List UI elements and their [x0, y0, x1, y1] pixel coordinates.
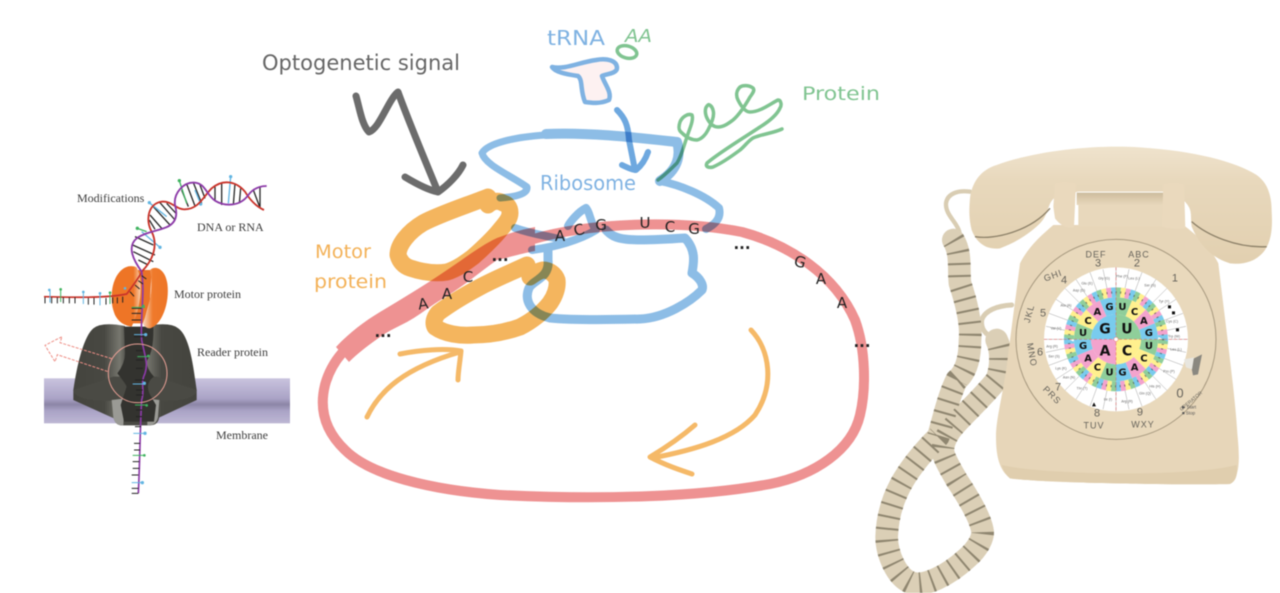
amino acid labels: Arg (R): [1046, 344, 1058, 348]
motor protein upper ring: [398, 197, 510, 273]
tRNA arrow: [617, 110, 648, 170]
mRNA codon letters: C: [665, 218, 675, 236]
telephone base: [996, 225, 1239, 484]
reader circle: [108, 344, 167, 403]
dial numbers: 3: [1095, 257, 1101, 269]
amino acid labels: Ala (A): [1061, 303, 1071, 307]
label: protein: Protein: [802, 83, 880, 105]
amino acid labels: Cys (C): [1166, 319, 1178, 323]
dial: [1016, 239, 1216, 439]
amino acid labels: Asp (D): [1073, 288, 1085, 292]
red axes: [1044, 267, 1188, 411]
DNA helix: [132, 175, 267, 272]
amino acid labels: Leu (L): [1128, 276, 1140, 280]
dial numbers: 5: [1040, 307, 1046, 319]
translocating strand: [138, 272, 146, 493]
motor direction arrow left: [367, 350, 461, 417]
mRNA codon letters: A: [816, 270, 827, 288]
stop and start markers: [1092, 305, 1179, 406]
centre letters: A: [1100, 343, 1111, 359]
middle ring letters: [1079, 302, 1153, 379]
label: motor protein: Motor: [315, 241, 371, 263]
middle ring letters: G: [1145, 328, 1153, 339]
mRNA codon letters: C: [463, 268, 473, 286]
amino acid labels: Phe (F): [1116, 274, 1128, 278]
dial numbers: 4: [1061, 274, 1067, 286]
middle ring letters: A: [1094, 307, 1102, 318]
label: DNA or RNA: DNA or RNA: [197, 220, 264, 234]
middle ring letters: C: [1131, 307, 1138, 318]
centre letters: C: [1122, 343, 1132, 359]
ribosome outline: [482, 134, 720, 320]
purple strand: [132, 183, 267, 272]
amino acid labels: Pro (P): [1163, 369, 1175, 373]
mRNA codon letters: ...: [491, 247, 509, 265]
amino acid labels: [1046, 274, 1182, 403]
middle ring letters: U: [1145, 341, 1153, 352]
codon centre quadrants: [1116, 314, 1141, 339]
label: motor protein: Motor protein: [174, 287, 241, 301]
label: membrane: Membrane: [216, 428, 268, 442]
dial numbers: GHI: [1042, 268, 1064, 283]
dial numbers: JKL: [1022, 303, 1036, 324]
base lower shading: [1002, 465, 1237, 484]
amino acid labels: Leu (L): [1170, 347, 1182, 351]
motor protein lower ring: [434, 265, 557, 335]
dial numbers: ABC: [1128, 249, 1150, 259]
codon outer ring: [1069, 292, 1163, 386]
helix rungs: [133, 183, 260, 265]
single strand tail: [44, 272, 142, 297]
mRNA codon letters: ...: [733, 235, 751, 253]
mRNA codon letters: C: [572, 220, 586, 240]
optogenetic arrow: [356, 92, 463, 192]
outer ring letters: [1069, 292, 1163, 386]
label: ribosome: Ribosome: [540, 171, 636, 195]
handset seam: [975, 208, 1267, 247]
middle ring letters: G: [1118, 368, 1127, 379]
protein chain: [658, 86, 782, 180]
dial numbers: PRS: [1041, 384, 1063, 406]
start and stop legend: ▶ Start: [1182, 404, 1197, 409]
middle ring letters: G: [1105, 302, 1114, 313]
middle ring letters: U: [1118, 302, 1127, 313]
dial numbers: 7: [1055, 381, 1061, 393]
panel: ribosome sketch: [262, 26, 880, 497]
mRNA codon letters: G: [792, 252, 808, 272]
middle ring letters: C: [1094, 363, 1101, 374]
dial numbers: [1022, 249, 1184, 430]
white ring: [1044, 267, 1188, 411]
dial numbers: 2: [1134, 257, 1140, 269]
label: motor protein: protein: [314, 271, 387, 293]
amino acid labels: Asn (N): [1063, 375, 1075, 379]
dial numbers: 6: [1037, 346, 1043, 358]
amino acid labels: Trp (W): [1168, 334, 1180, 338]
label: reader protein: Reader protein: [197, 345, 268, 359]
cradle prongs: [1053, 182, 1076, 228]
dial numbers: 9: [1137, 406, 1143, 418]
mRNA codon letters: G: [595, 216, 607, 234]
membrane: [44, 378, 290, 423]
label: optogenetic signal: Optogenetic signal: [262, 51, 460, 75]
amino acid labels: Ser (S): [1048, 354, 1060, 358]
amino acid labels: Val (V): [1051, 326, 1061, 330]
strand ticks: [45, 276, 146, 493]
motor direction arrow right: [650, 330, 768, 474]
amino acid labels: Thr (T): [1077, 386, 1087, 390]
dial numbers: MNO: [1025, 342, 1039, 367]
hollow under handset: [1077, 193, 1163, 205]
middle ring letters: A: [1140, 316, 1148, 327]
reader protein: [73, 324, 197, 425]
amino acid labels: Glu (E): [1081, 281, 1093, 285]
tRNA shape: [552, 59, 617, 103]
middle ring letters: U: [1079, 328, 1087, 339]
panel: nanopore diagram: [44, 175, 290, 493]
mRNA codon letters: G: [688, 220, 700, 238]
amino acid labels: Gly (G): [1098, 276, 1110, 280]
mRNA codon letters: [374, 214, 871, 351]
dial numbers: 8: [1094, 407, 1100, 419]
motor protein: [112, 266, 168, 328]
centre letters: U: [1121, 321, 1133, 337]
label: AA: AA: [624, 26, 652, 47]
telephone cord: [887, 191, 1012, 584]
middle ring letters: C: [1084, 316, 1092, 327]
operator label: OPERATOR: [1179, 390, 1204, 413]
mRNA codon letters: A: [442, 285, 453, 303]
dial face: [1016, 239, 1216, 439]
amino acid labels: Lys (K): [1055, 366, 1067, 370]
mRNA codon letters: A: [837, 294, 848, 312]
dial numbers: 1: [1172, 272, 1178, 284]
amino acid labels: Ser (S): [1144, 283, 1156, 287]
mRNA codon letters: A: [417, 294, 430, 314]
handset: [969, 147, 1272, 264]
red strand: [142, 182, 264, 272]
mRNA codon letters: U: [640, 214, 650, 232]
helix modification marks: [142, 177, 231, 247]
middle ring letters: U: [1105, 368, 1114, 379]
mRNA codon letters: ...: [374, 323, 392, 341]
label: tRNA: tRNA: [547, 26, 605, 50]
amino acid labels: Tyr (Y): [1159, 299, 1169, 303]
dial numbers: TUV: [1084, 420, 1104, 430]
middle ring letters: A: [1084, 353, 1092, 364]
dial numbers: DEF: [1086, 249, 1106, 259]
start and stop legend: [1182, 404, 1197, 415]
middle ring letters: A: [1131, 363, 1139, 374]
middle ring letters: C: [1140, 353, 1148, 364]
centre letters: [1099, 321, 1133, 359]
mRNA loop: [323, 224, 864, 497]
mRNA codon letters: ...: [853, 333, 871, 351]
amino acid labels: His (H): [1149, 384, 1161, 388]
panel: rotary telephone: [887, 147, 1272, 584]
dial numbers: 0: [1176, 385, 1184, 400]
amino acid labels: Arg (R): [1121, 399, 1133, 403]
amino acid ring: [616, 44, 638, 60]
dial numbers: WXY: [1131, 419, 1155, 429]
modification dots: [48, 287, 150, 484]
amino acid labels: Gln (Q): [1139, 391, 1151, 395]
amino acid labels: Ile (I): [1104, 397, 1112, 401]
middle ring letters: G: [1079, 341, 1087, 352]
start and stop legend: ■ Stop: [1182, 410, 1196, 415]
codon middle ring: [1082, 306, 1149, 373]
white ring separators: [1044, 267, 1188, 411]
label: modifications: Modifications: [77, 191, 145, 205]
centre letters: G: [1099, 321, 1111, 337]
mRNA codon letters: A: [555, 227, 566, 245]
exit arrow: [45, 337, 112, 372]
finger stop: [1190, 354, 1202, 375]
